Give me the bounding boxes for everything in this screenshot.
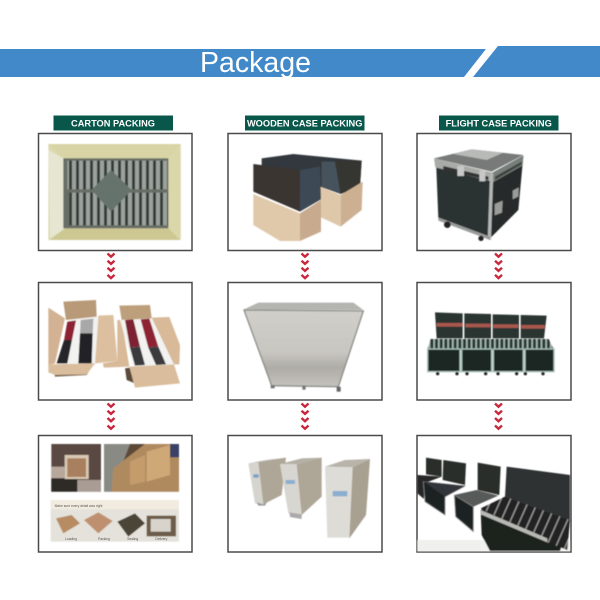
- title: Package: [200, 47, 311, 79]
- panel: warehouse photos and packing steps: Make sure every detail was right: [55, 504, 102, 508]
- heading: flight case packing: FLIGHT CASE PACKING: [446, 118, 552, 128]
- arrow: column 1 row 1 to row 2: [108, 254, 114, 278]
- panel: LED panels on wooden crates: [228, 134, 382, 250]
- panel: warehouse photos and packing steps: [38, 436, 192, 552]
- panel: three wooden cases: [228, 436, 382, 552]
- panel: closed wooden case: [228, 282, 382, 400]
- panel: warehouse photos and packing steps: Delivery: [155, 537, 168, 541]
- arrow: column 3 row 1 to row 2: [495, 254, 502, 278]
- arrow: column 3 row 2 to row 3: [495, 404, 502, 429]
- panel: warehouse photos and packing steps: Loading: [65, 537, 77, 541]
- heading: carton packing: [54, 116, 173, 130]
- arrow: column 1 row 2 to row 3: [108, 404, 114, 429]
- panel: row of flight cases with open lids: [417, 282, 571, 400]
- panel: warehouse photos and packing steps: Sealing: [127, 537, 138, 541]
- heading: carton packing: CARTON PACKING: [71, 118, 155, 128]
- panel: carton with LED modules: [38, 134, 192, 250]
- panel: open flight cases with modules: [417, 436, 571, 552]
- panel: warehouse photos and packing steps: Packing: [98, 537, 110, 541]
- heading: wooden case packing: [245, 116, 364, 130]
- arrow: column 2 row 2 to row 3: [302, 404, 308, 429]
- panel: opened cartons: [38, 282, 192, 400]
- heading: flight case packing: [439, 116, 558, 130]
- panel: flight case: [417, 134, 571, 250]
- heading: wooden case packing: WOODEN CASE PACKING: [247, 118, 362, 128]
- arrow: column 2 row 1 to row 2: [302, 254, 308, 278]
- title banner: [0, 46, 600, 79]
